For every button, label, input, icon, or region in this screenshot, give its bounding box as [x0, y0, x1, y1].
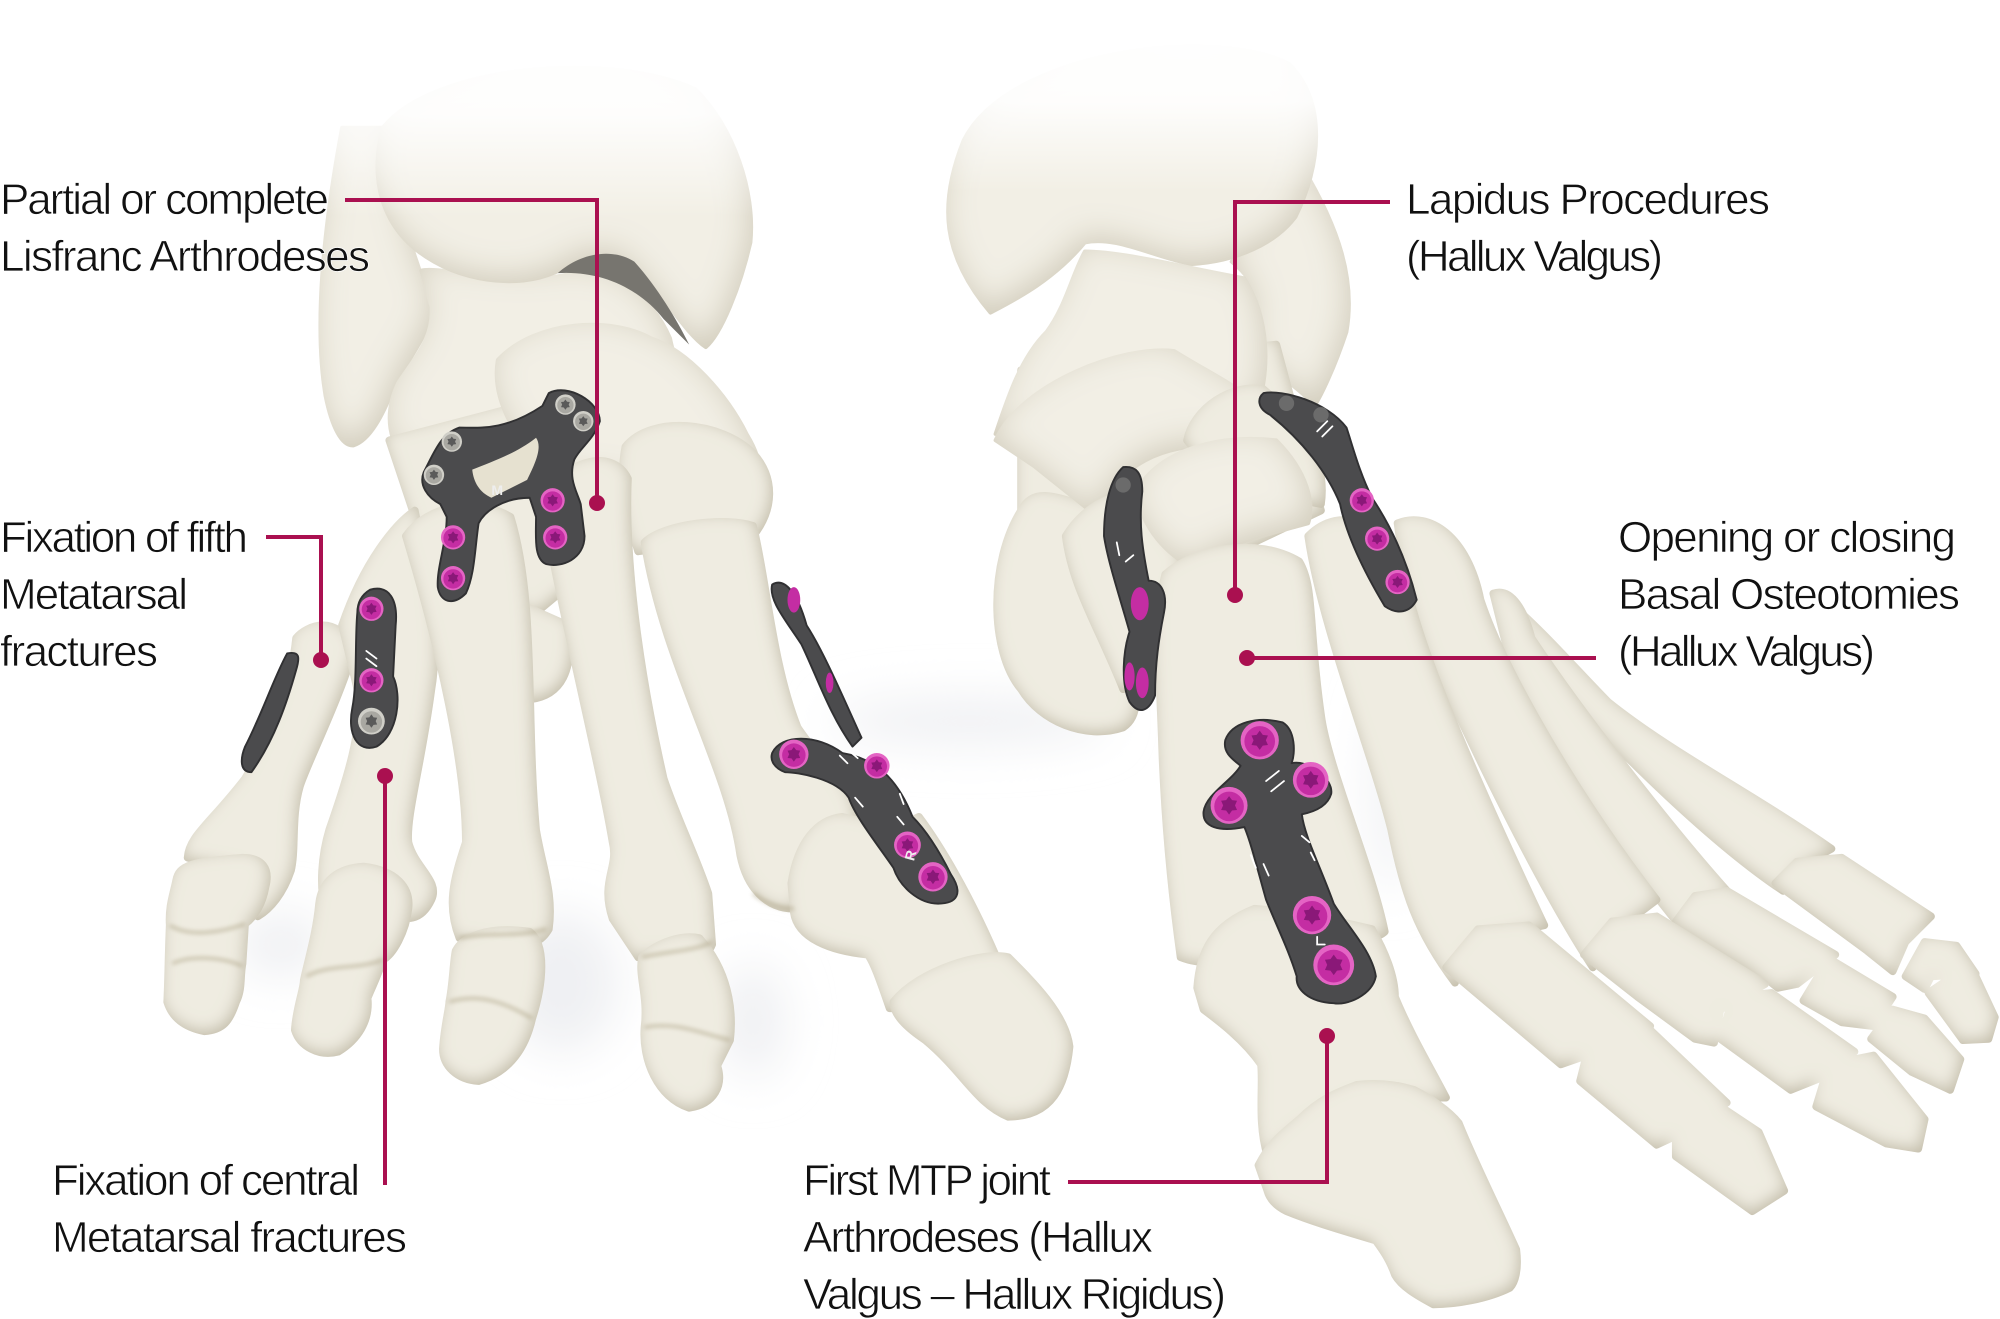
right foot: fourth metatarsal [1493, 592, 1729, 932]
callout text: fifth metatarsal: Fixation of fifth [0, 513, 248, 562]
left foot: talus and calcaneus [390, 270, 715, 461]
left foot: tibia [377, 68, 751, 347]
right foot: midfoot backing [1021, 345, 1321, 689]
right foot: tibia [948, 47, 1316, 313]
left foot: third metatarsal [406, 506, 550, 944]
leader dot: fifth metatarsal [313, 652, 329, 668]
leader line: basal osteotomies [1246, 656, 1596, 660]
left foot: central bone behind metatarsals [504, 600, 570, 699]
callout: fifth metatarsal fractures [0, 513, 329, 676]
left foot: tarsal cuboid [389, 408, 715, 613]
leader dot: central metatarsal [377, 768, 393, 784]
plate: fifth metatarsal side [242, 653, 298, 772]
left foot: fourth metatarsal [322, 511, 434, 918]
left foot: fifth metatarsal [188, 625, 354, 916]
right foot: first metatarsal [1159, 548, 1385, 963]
left foot: toe joint lines [170, 893, 794, 1040]
plate: first metatarsal side [772, 583, 862, 747]
plate: first ray left foot: R [901, 848, 919, 862]
callout text: fifth metatarsal: fractures [0, 627, 158, 676]
right foot: fifth metatarsal [1506, 600, 1831, 891]
plate: Lapidus [1259, 392, 1417, 612]
left foot: medial cuneiform [623, 426, 769, 551]
left foot: fifth toe [167, 858, 267, 1031]
right foot: first proximal phalanx [1197, 909, 1446, 1155]
callout: central metatarsal fractures [52, 768, 407, 1262]
plate: first ray left foot [772, 739, 957, 904]
leader dot: Lapidus [1227, 587, 1243, 603]
right foot: second metatarsal [1308, 520, 1544, 983]
left foot: fourth toe [295, 867, 409, 1053]
floor shadows [236, 689, 1410, 1078]
right foot: top fade [919, 13, 1366, 191]
callout text: first MTP: Valgus – Hallux Rigidus) [803, 1270, 1226, 1319]
callout text: Lapidus: Lapidus Procedures [1406, 175, 1770, 224]
left foot skeleton [167, 13, 1070, 1117]
callout text: central metatarsal: Fixation of central [52, 1156, 360, 1205]
right foot: upper cuneiform [1187, 388, 1322, 504]
right foot: third metatarsal [1398, 520, 1657, 967]
right foot: calcaneus [997, 496, 1136, 731]
right foot: fibula [1232, 166, 1349, 406]
plate: first ray right foot [1203, 720, 1376, 1004]
right foot: third toe [1584, 916, 1925, 1149]
left foot: first proximal phalanx [791, 817, 1002, 1008]
plate: Lisfranc [422, 390, 600, 601]
right foot: intermediate cuneiform [1066, 497, 1181, 689]
callout text: Lisfranc: Lisfranc Arthrodeses [0, 232, 370, 281]
right foot: navicular [996, 350, 1283, 517]
leader line: fifth metatarsal [266, 537, 321, 660]
callout text: basal osteotomies: Opening or closing [1618, 513, 1956, 562]
callout text: basal osteotomies: Basal Osteotomies [1618, 570, 1960, 619]
callout text: Lapidus: (Hallux Valgus) [1406, 232, 1663, 281]
left foot: second metatarsal [542, 461, 712, 957]
leader line: Lisfranc [345, 200, 597, 503]
right foot: talus [996, 251, 1266, 434]
plate: medial side [1104, 467, 1165, 710]
callout text: basal osteotomies: (Hallux Valgus) [1618, 627, 1875, 676]
leader line: first MTP [1068, 1036, 1327, 1182]
leader line: central metatarsal [383, 776, 387, 1185]
callout text: central metatarsal: Metatarsal fractures [52, 1213, 407, 1262]
plate: Lisfranc: M [491, 482, 503, 498]
right foot: second toe [1446, 925, 1784, 1211]
callout text: first MTP: Arthrodeses (Hallux [803, 1213, 1153, 1262]
left foot: third toe [443, 930, 541, 1081]
right foot: fourth toe [1676, 891, 1960, 1090]
right foot: medial cuneiform [1136, 439, 1310, 568]
callout text: fifth metatarsal: Metatarsal [0, 570, 188, 619]
right foot skeleton [919, 13, 1995, 1304]
left foot: fibula [320, 128, 434, 445]
callout: Lisfranc arthrodeses [0, 175, 605, 511]
left foot: second toe [641, 937, 731, 1108]
left foot: navicular [497, 325, 758, 498]
left foot: first metatarsal [645, 522, 853, 909]
right foot: fifth toe [1775, 858, 1995, 1040]
callout: first MTP joint arthrodeses [803, 1028, 1335, 1319]
leader line: Lapidus [1235, 202, 1390, 595]
callout: basal osteotomies [1239, 513, 1960, 676]
left foot: joint implant gap [558, 254, 689, 345]
leader dot: basal osteotomies [1239, 650, 1255, 666]
left foot: top fade [294, 13, 779, 217]
plate: fourth metatarsal [351, 589, 398, 748]
right foot: first distal phalanx [1258, 1084, 1517, 1304]
leader dot: first MTP [1319, 1028, 1335, 1044]
left foot: first distal phalanx [893, 956, 1070, 1117]
callout text: Lisfranc: Partial or complete [0, 175, 329, 224]
leader dot: Lisfranc [589, 495, 605, 511]
callout: Lapidus procedures [1227, 175, 1770, 603]
callout text: first MTP: First MTP joint [803, 1156, 1051, 1205]
